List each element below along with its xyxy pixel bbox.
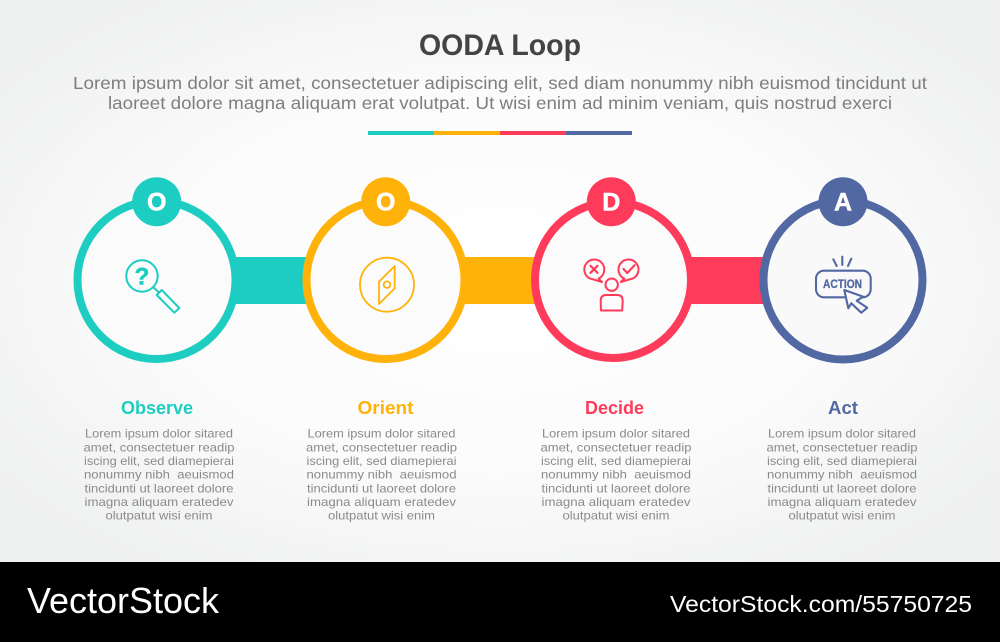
subtitle: laoreet dolore magna aliquam erat volutpat. Ut wisi enim ad minim veniam, quis nostrud exerci [108,93,892,113]
description: orient: Lorem ipsum dolor sitared [308,428,456,441]
panel: orient [306,177,464,523]
description: observe: tincidunti ut laoreet dolore [84,482,234,495]
title divider [368,131,632,135]
badge: A [818,177,868,226]
badge: O: O [147,188,166,216]
badge: A: A [834,188,852,216]
footer logo: VectorStock [27,580,220,621]
description: orient: imagna aliquam eratedev [307,496,456,509]
panel: act [764,177,922,523]
description: act: tincidunti ut laoreet dolore [768,482,916,495]
icon: magnifier with question mark [126,260,179,313]
panel: decide [535,177,692,523]
description: orient: nonummy nibh aeuismod [306,469,456,482]
badge: D: D [602,188,620,216]
description: observe: nonummy nibh aeuismod [84,469,234,482]
description: decide: amet, consectetuer readip [540,441,692,454]
description: decide: tincidunti ut laoreet dolore [542,482,690,495]
panel: observe [78,177,236,523]
description: act: imagna aliquam eratedev [768,496,917,509]
ring: observe [78,201,236,359]
ring: orient [306,201,464,359]
icon: compass [360,258,414,312]
description: orient: olutpatut wisi enim [328,510,435,523]
description: observe: olutpatut wisi enim [106,510,212,523]
ring: act [764,200,922,360]
title: OODA Loop [419,29,581,62]
heading: decide: Decide [585,398,644,418]
description: act: Lorem ipsum dolor sitared [768,428,916,441]
description: act: olutpatut wisi enim [788,510,896,523]
heading: act: Act [828,398,858,418]
description: decide [540,428,692,523]
description: decide: Lorem ipsum dolor sitared [542,428,690,441]
description: decide: imagna aliquam eratedev [542,496,691,509]
heading: observe: Observe [121,398,193,418]
icon: action button with cursor [816,257,871,313]
description: decide: nonummy nibh aeuismod [541,469,691,482]
icon: magnifier with question mark: ? [135,264,149,290]
description: observe: iscing elit, sed diamepierai [84,455,234,468]
description: decide: iscing elit, sed diamepierai [541,455,691,468]
description: observe: imagna aliquam eratedev [84,496,234,509]
connector: observe to orient [230,257,310,304]
description: decide: olutpatut wisi enim [562,510,670,523]
footer image id: VectorStock.com/55750725 [670,591,972,617]
description: orient: iscing elit, sed diamepierai [306,455,456,468]
description: act: amet, consectetuer readip [766,441,918,454]
badge: O [361,177,410,226]
description: act: iscing elit, sed diamepierai [767,455,917,468]
ring: decide [535,202,691,358]
connector: orient to decide [460,257,540,304]
description: act: nonummy nibh aeuismod [767,469,917,482]
footer bar [0,562,1000,642]
description: orient: amet, consectetuer readip [306,441,457,454]
description: observe [84,428,234,523]
description: observe: amet, consectetuer readip [84,441,234,454]
description: act [766,428,918,523]
description: orient: tincidunti ut laoreet dolore [307,482,456,495]
description: orient [306,428,457,523]
icon: person deciding between cross and check [584,260,639,310]
heading: orient: Orient [358,398,414,418]
subtitle [73,73,927,113]
badge: O: O [376,188,395,216]
badge: O [132,177,181,226]
icon: action button with cursor: ACTION [823,277,862,291]
description: observe: Lorem ipsum dolor sitared [85,428,233,441]
subtitle: Lorem ipsum dolor sit amet, consectetuer adipiscing elit, sed diam nonummy nibh euismod tincidunt ut [73,73,927,93]
badge: D [587,177,636,226]
connector: decide to act [688,257,768,304]
